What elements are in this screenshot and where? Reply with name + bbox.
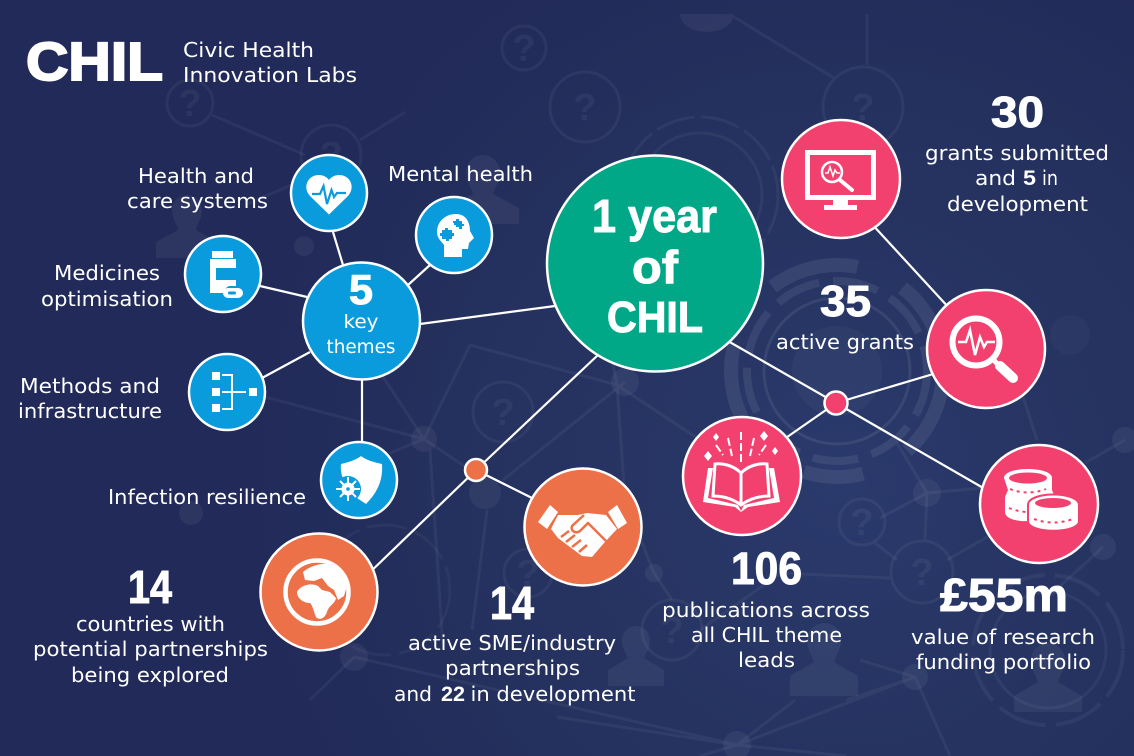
stat: 30 grants submitted: 5 bbox=[1023, 167, 1036, 190]
label: mental health: Mental health bbox=[388, 162, 533, 186]
icon: handshake bbox=[524, 468, 642, 586]
stat: 106 publications: leads bbox=[738, 648, 795, 672]
central node: 1 year of CHIL: 1 year bbox=[592, 190, 717, 242]
background network pattern: ? bbox=[516, 553, 540, 595]
brand logo: CHIL bbox=[26, 32, 163, 92]
background network pattern: ? bbox=[851, 87, 875, 129]
label: methods and infrastructure: infrastructure bbox=[18, 399, 162, 423]
junction dot: outputs bbox=[824, 392, 848, 414]
icon: globe bbox=[260, 534, 378, 650]
brand logo bbox=[26, 32, 357, 92]
background network pattern: ? bbox=[573, 87, 597, 129]
stat: £55m research funding: value of research bbox=[911, 625, 1095, 649]
stat: 35 active grants: active grants bbox=[776, 330, 914, 354]
central node: 1 year of CHIL: CHIL bbox=[607, 293, 703, 342]
stat: 30 grants submitted: grants submitted bbox=[925, 141, 1109, 165]
icon: monitor with magnifier bbox=[782, 120, 900, 238]
stat: 14 SME partnerships: 14 bbox=[490, 577, 534, 629]
stat: 14 SME partnerships: in development bbox=[470, 682, 636, 706]
label: health and care systems: care systems bbox=[127, 189, 268, 213]
central node: 1 year of CHIL: of bbox=[632, 241, 679, 293]
icon: head with puzzle, mental health bbox=[416, 197, 492, 273]
stat: 106 publications: 106 bbox=[731, 543, 802, 594]
stat: 14 countries: being explored bbox=[71, 663, 229, 687]
background network pattern: ? bbox=[491, 392, 515, 434]
stat: 14 countries: 14 bbox=[128, 561, 172, 613]
background network pattern: ? bbox=[910, 552, 934, 594]
label: methods and infrastructure bbox=[18, 374, 162, 423]
icon: medicine bottle and capsule bbox=[185, 236, 261, 312]
stat: 30 grants submitted bbox=[925, 88, 1109, 216]
label: medicines optimisation: Medicines bbox=[54, 261, 160, 285]
label: health and care systems: Health and bbox=[138, 164, 254, 188]
junction dot: partnerships bbox=[465, 459, 487, 481]
icon: stacked coins bbox=[980, 445, 1098, 563]
icon: open book with sparkles bbox=[683, 417, 801, 535]
stat: £55m research funding bbox=[911, 569, 1095, 674]
background network pattern: ? bbox=[850, 502, 874, 544]
brand logo: Innovation Labs bbox=[183, 63, 357, 87]
stat: 106 publications bbox=[662, 543, 870, 672]
background network pattern: ? bbox=[178, 83, 202, 125]
icon: magnifier with pulse bbox=[927, 290, 1045, 408]
brand logo: Civic Health bbox=[183, 38, 314, 62]
icon: flow diagram, methods and infrastructure bbox=[189, 354, 265, 430]
label: medicines optimisation: optimisation bbox=[41, 287, 173, 311]
stat: 14 SME partnerships: active SME/industry bbox=[408, 631, 616, 655]
hub: 5 key themes: key bbox=[344, 311, 378, 333]
stat: 106 publications: all CHIL theme bbox=[691, 623, 842, 647]
stat: £55m research funding: funding portfolio bbox=[916, 650, 1091, 674]
label: medicines optimisation bbox=[41, 261, 173, 311]
hub: 5 key themes bbox=[303, 262, 420, 380]
hub: 5 key themes: 5 bbox=[349, 266, 373, 313]
stat: 35 active grants bbox=[776, 277, 914, 354]
stat: 14 countries: potential partnerships bbox=[33, 637, 268, 661]
background network pattern: ? bbox=[319, 135, 343, 177]
icon: shield and virus, infection resilience bbox=[321, 442, 397, 518]
stat: £55m research funding: £55m bbox=[940, 569, 1068, 621]
stat: 30 grants submitted: 30 bbox=[991, 88, 1044, 137]
stat: 14 countries bbox=[33, 561, 268, 687]
label: health and care systems bbox=[127, 164, 268, 213]
stat: 35 active grants: 35 bbox=[820, 277, 871, 326]
central node: 1 year of CHIL bbox=[547, 156, 763, 372]
stat: 30 grants submitted: development bbox=[947, 192, 1088, 216]
ghost people bbox=[156, 195, 218, 258]
stat: 14 SME partnerships: and bbox=[394, 682, 432, 706]
stat: 14 countries: countries with bbox=[76, 612, 225, 636]
stat: 106 publications: publications across bbox=[662, 598, 870, 622]
gears bbox=[764, 298, 910, 444]
stat: 14 SME partnerships: 22 bbox=[441, 683, 465, 706]
stat: 14 SME partnerships: partnerships bbox=[445, 656, 580, 680]
icon: heart, health and care systems bbox=[291, 155, 367, 231]
background network pattern: ? bbox=[660, 610, 684, 652]
background network pattern: ? bbox=[512, 28, 536, 70]
stat: 14 SME partnerships bbox=[394, 577, 636, 706]
hub: 5 key themes: themes bbox=[326, 336, 396, 358]
stat: 30 grants submitted: and bbox=[975, 166, 1016, 190]
label: methods and infrastructure: Methods and bbox=[20, 374, 160, 398]
connector lines bbox=[260, 222, 985, 577]
stat: 30 grants submitted: in bbox=[1042, 166, 1058, 190]
label: infection resilience: Infection resilience bbox=[108, 485, 306, 509]
